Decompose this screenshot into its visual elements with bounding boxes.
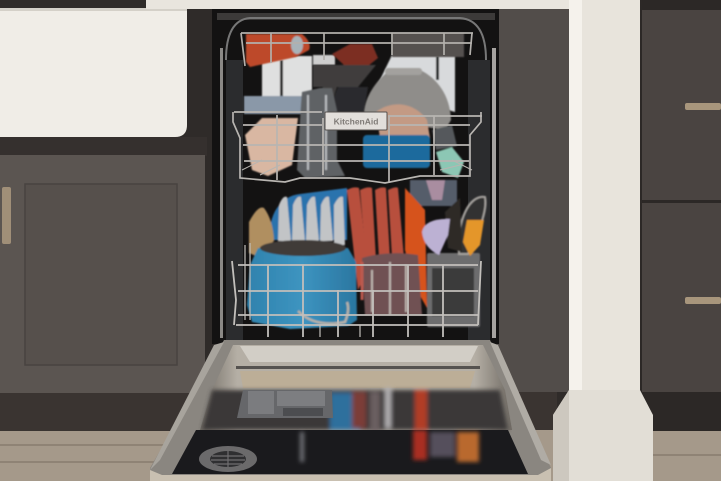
third rack tray <box>392 33 464 57</box>
top rack wire <box>241 33 473 66</box>
icon: orange board <box>405 188 427 308</box>
icon: purple scoop <box>422 219 450 255</box>
icon: white plates <box>278 197 345 245</box>
icon: blue platter <box>270 188 347 240</box>
icon: red cup <box>332 44 378 66</box>
icon: teal cup <box>436 147 464 178</box>
panel: right side filler panel <box>497 9 569 392</box>
dishwasher interior <box>212 9 499 345</box>
door bottom steel edge <box>150 468 551 481</box>
middle rack wire <box>233 112 482 183</box>
silverware divider <box>313 65 376 111</box>
icon: pink cup <box>245 118 298 176</box>
icon: utensil basket <box>427 253 480 327</box>
icon: upper drawer handle <box>685 103 721 110</box>
icon: glass measuring jug <box>362 253 422 315</box>
panel: right cabinets <box>640 0 721 431</box>
icon: glass tumbler <box>297 88 345 178</box>
white pillar <box>553 0 653 481</box>
rear wall reflections <box>244 55 455 114</box>
icon: purple items above rack <box>410 180 457 206</box>
toe kick beside dishwasher <box>497 392 557 430</box>
icon: yellow spatula <box>463 220 484 256</box>
icon: drain vent <box>199 446 257 472</box>
icon: blue mixing bowl <box>247 248 357 329</box>
panel: open dishwasher door <box>150 340 551 481</box>
icon: whisk <box>459 197 486 254</box>
door floor reflections <box>202 388 508 432</box>
icon: terracotta plates <box>347 187 404 290</box>
icon: left cabinet handle <box>2 187 11 244</box>
top rack dishes <box>246 33 464 112</box>
panel: left base cabinet <box>0 137 207 431</box>
icon: tan plate <box>249 208 274 256</box>
icon: lower drawer handle <box>685 297 721 304</box>
icon: grey textured bowl <box>364 68 451 138</box>
icon: red mug <box>246 34 310 67</box>
bottom rack dishes <box>247 180 486 329</box>
farmhouse sink <box>0 8 187 137</box>
tub back wall <box>200 345 512 430</box>
KitchenAid badge: KitchenAid <box>334 116 378 126</box>
bottom rack wire <box>232 243 481 337</box>
middle rack dishes <box>245 68 464 178</box>
door outer frame <box>150 340 551 481</box>
KitchenAid badge <box>325 112 387 130</box>
countertop <box>146 0 572 9</box>
icon: blue container <box>363 135 430 168</box>
icon: detergent dispenser <box>237 390 333 418</box>
